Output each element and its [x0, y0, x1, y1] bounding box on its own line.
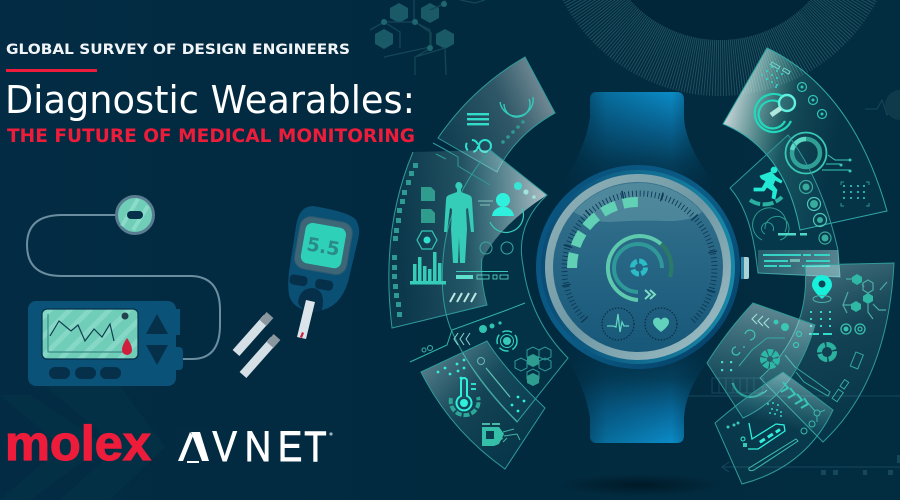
title: Diagnostic Wearables:	[5, 78, 415, 123]
watch strap top	[560, 92, 720, 190]
watch shadow	[555, 474, 725, 496]
panel: lower left connector line	[410, 303, 551, 386]
watch face highlight	[574, 183, 702, 222]
insulin pump tube	[27, 215, 220, 359]
icon: documents	[421, 187, 435, 223]
small data rows	[450, 271, 508, 302]
centre gauge	[608, 236, 671, 300]
icon: location pin	[812, 275, 832, 302]
icon: hexagon target	[417, 231, 437, 249]
rings	[841, 324, 865, 334]
panel: runner	[730, 135, 840, 277]
panel: left body scan	[389, 143, 568, 422]
outlined chips	[832, 352, 863, 402]
heart dial	[645, 308, 677, 340]
icon: donut chart	[786, 132, 850, 174]
watch	[536, 92, 749, 443]
panel: small data strip	[758, 250, 840, 277]
icon: runner	[754, 167, 782, 199]
icon: concentric arcs	[753, 208, 789, 240]
watch crown	[741, 257, 749, 279]
decorative hexagon network	[370, 0, 485, 75]
glucose sensor patch	[116, 196, 154, 234]
icon: device	[482, 423, 520, 446]
icon: chip device	[741, 423, 785, 449]
heading: survey label: GLOBAL SURVEY OF DESIGN ENGINEERS	[6, 42, 350, 58]
rings	[466, 140, 491, 152]
molex logo: molex	[5, 417, 151, 471]
watch case	[536, 165, 740, 369]
decorative radial hatched ring	[571, 0, 869, 68]
insulin pump	[28, 301, 183, 386]
rings	[798, 82, 826, 118]
dots	[501, 120, 525, 144]
subtitle: THE FUTURE OF MEDICAL MONITORING	[7, 126, 415, 147]
icon: dot matrix	[843, 185, 865, 199]
avnet logo: AVNET	[178, 423, 327, 471]
background chevrons	[0, 386, 165, 500]
glucose meter	[288, 206, 359, 312]
device outline	[433, 143, 490, 185]
panel: lower right device	[715, 372, 833, 484]
progress segments	[572, 202, 638, 268]
pulse dial	[602, 308, 634, 340]
squares column	[392, 163, 418, 317]
faint background data lines	[670, 90, 900, 475]
icon: segmented target	[820, 344, 834, 360]
glucose meter: 5.5	[305, 233, 341, 261]
icon: hex molecule	[843, 274, 887, 319]
dot grid	[809, 311, 832, 335]
panel: lower left thermometer	[421, 341, 545, 469]
icon: gear wheel	[764, 352, 776, 366]
icon: data lines	[467, 113, 489, 125]
red divider	[6, 69, 97, 72]
icon: person bust	[478, 193, 523, 232]
panel: upper right	[723, 48, 887, 230]
loose test strips	[236, 315, 277, 375]
panel: upper left	[438, 57, 555, 172]
circuit	[785, 355, 830, 396]
icon: thermometer	[451, 378, 479, 415]
icon: arc gauge	[500, 97, 533, 117]
bar chart	[410, 252, 446, 284]
long capsule	[749, 439, 798, 471]
rings column	[800, 180, 831, 244]
icon: magnifier target	[755, 94, 795, 132]
panel: lower right arcs	[707, 303, 815, 418]
watch strap bottom	[560, 345, 720, 443]
rings	[480, 242, 513, 254]
icon: human body	[444, 182, 474, 263]
panel: right map	[760, 263, 894, 442]
icon: dot grid	[761, 66, 783, 88]
test strip in meter	[297, 300, 315, 339]
watch ticks	[564, 193, 714, 322]
dots	[514, 182, 536, 199]
